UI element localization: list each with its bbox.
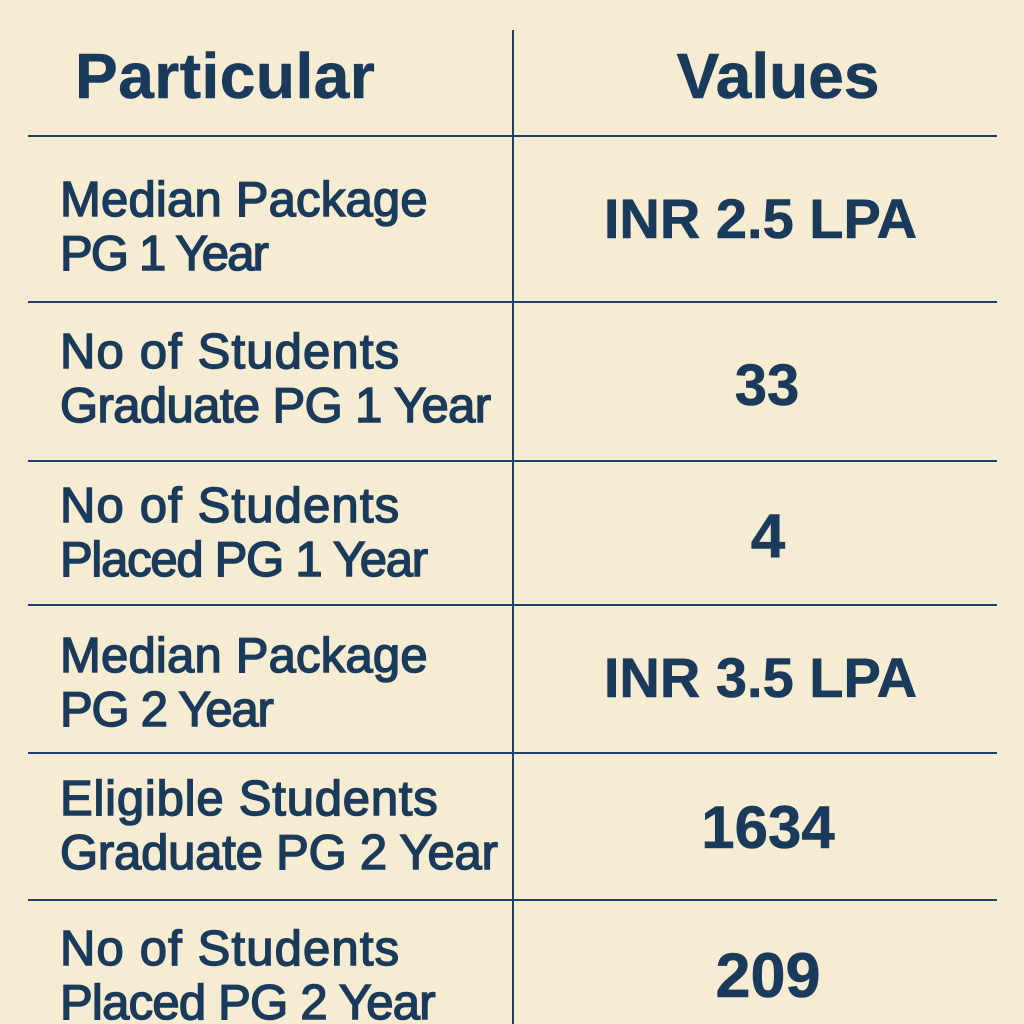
row 3 label: No of Students (60, 479, 400, 533)
row 2 label (60, 325, 491, 433)
row 3 label: Placed PG 1 Year (60, 533, 427, 587)
row 6 value: 209 (715, 941, 821, 1011)
row 1 label: PG 1 Year (60, 227, 267, 281)
row 1 label (60, 173, 428, 281)
row 4 value: INR 3.5 LPA (604, 646, 917, 709)
row 5 value: 1634 (701, 794, 835, 861)
row 4 label (60, 629, 428, 737)
row 2 label: Graduate PG 1 Year (60, 379, 491, 433)
row 5 label: Eligible Students (60, 772, 439, 826)
row 4 label: PG 2 Year (60, 683, 273, 737)
row 4 label: Median Package (60, 629, 428, 683)
row 3 value: 4 (751, 502, 785, 571)
row 5 label (60, 772, 498, 880)
row 3 label (60, 479, 428, 587)
row 1 label: Median Package (60, 173, 428, 227)
row 2 label: No of Students (60, 325, 400, 379)
row 1 value: INR 2.5 LPA (604, 187, 917, 250)
heading: Values: Values (677, 40, 879, 112)
row 6 label: No of Students (60, 922, 400, 976)
heading: Particular: Particular (75, 40, 375, 112)
row 6 label (60, 922, 436, 1024)
row 2 value: 33 (735, 353, 799, 418)
row 5 label: Graduate PG 2 Year (60, 826, 498, 880)
